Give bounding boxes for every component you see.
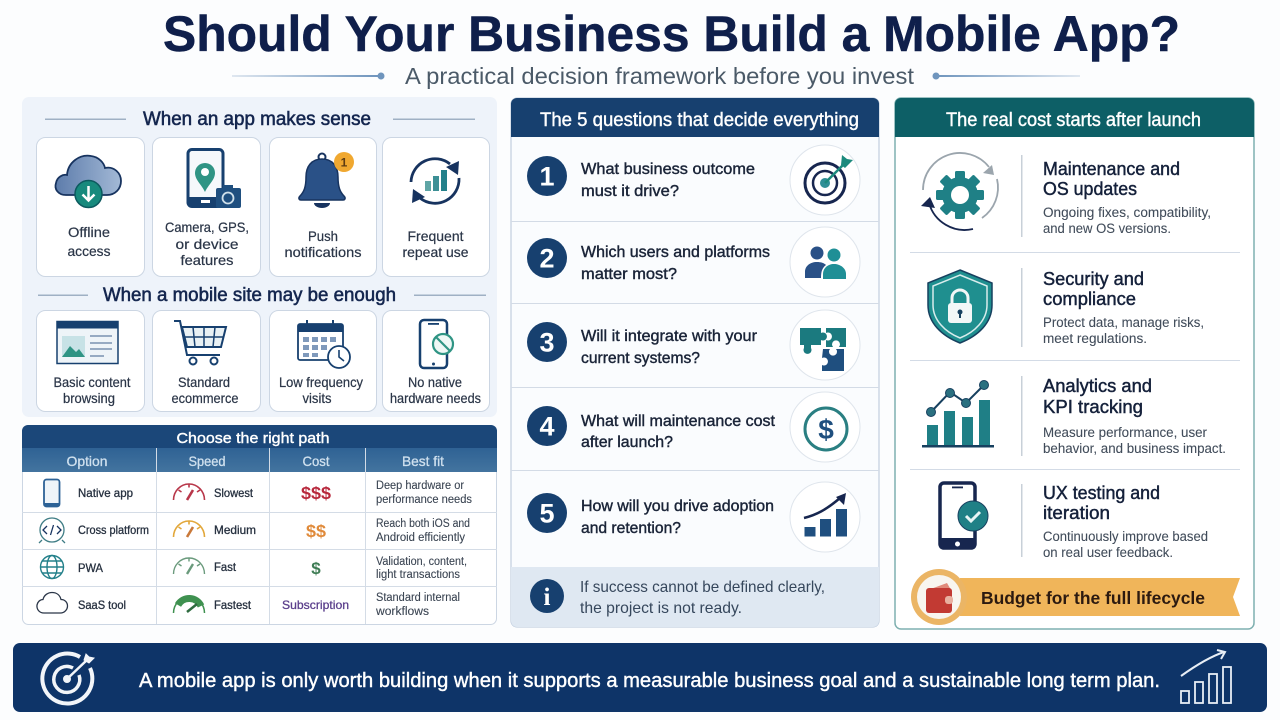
row: native app [44, 480, 472, 506]
row: cross platform: Cross platform [78, 523, 149, 537]
callout: success definition [511, 567, 879, 627]
icon: phone [44, 480, 60, 506]
icon: shield with lock [928, 270, 992, 343]
question 2: Which users and platforms [581, 244, 770, 261]
row: cross platform: Medium [214, 523, 256, 537]
icon: growth bars outline [1181, 650, 1231, 703]
icon: phone with prohibited sign [420, 320, 453, 368]
row: SaaS tool: SaaS tool [78, 598, 126, 612]
heading: when a mobile site may be enough: When a mobile site may be enough [103, 285, 396, 306]
question 4 [527, 392, 860, 462]
subtitle: A practical decision framework before you invest [405, 63, 914, 89]
item: ux testing: on real user feedback. [1043, 545, 1173, 560]
card: camera, GPS, device features: or device [176, 236, 239, 252]
banner: budget for the full lifecycle: Budget for the full lifecycle [981, 588, 1205, 608]
icon: fastest gauge [174, 597, 204, 613]
item: security: Protect data, manage risks, [1043, 315, 1204, 330]
icon: cloud outline [37, 592, 68, 613]
question 2: matter most? [581, 266, 677, 283]
item: maintenance: Maintenance and [1043, 159, 1180, 179]
row: native app: Slowest [214, 486, 254, 500]
panel: the real cost: The real cost starts after launch [946, 110, 1201, 131]
row: cross platform: Android efficiently [376, 532, 465, 544]
panel: when an app makes sense and mobile site [22, 97, 497, 417]
question 5: and retention? [581, 520, 681, 537]
question 4: What will maintenance cost [581, 413, 776, 430]
item: analytics: behavior, and business impact. [1043, 441, 1226, 456]
icon: slow gauge [174, 484, 204, 500]
item: ux testing: Continuously improve based [1043, 529, 1208, 544]
card: basic content browsing: browsing [63, 390, 115, 406]
item: analytics: KPI tracking [1043, 397, 1143, 417]
row: cross platform: Reach both iOS and [376, 518, 470, 530]
icon: phone with pin and camera [188, 150, 241, 208]
question 5: How will you drive adoption [581, 498, 774, 515]
card: low frequency visits: visits [302, 390, 332, 406]
icon: bar and line chart [922, 380, 994, 448]
row: cross platform [39, 518, 470, 544]
card: push notifications [270, 138, 376, 276]
icon: growth chart [804, 493, 847, 536]
row: PWA [40, 556, 467, 581]
card: basic content browsing: Basic content [54, 374, 131, 390]
panel: the 5 questions [511, 98, 879, 627]
row: SaaS tool: Subscription [282, 598, 349, 612]
icon: dollar circle [805, 408, 847, 450]
footer banner: A mobile app is only worth building when it supports a measurable business goal and a sustainable long term plan. [139, 670, 1160, 692]
card: no native hardware needs: No native [408, 374, 462, 390]
icon: code circle [39, 518, 65, 543]
item: maintenance: and new OS versions. [1043, 221, 1171, 236]
icon: phone with check [939, 483, 988, 549]
panel: the 5 questions: The 5 questions that decide everything [540, 110, 859, 131]
card: standard ecommerce: ecommerce [172, 390, 239, 406]
subtitle [232, 63, 1080, 89]
row: native app: performance needs [376, 494, 472, 506]
card: basic content browsing [36, 310, 144, 412]
item: security: compliance [1043, 289, 1136, 309]
card: low frequency visits: Low frequency [279, 374, 363, 390]
question 3: Will it integrate with your [581, 328, 758, 345]
card: frequent repeat use [382, 138, 490, 276]
footer banner [13, 643, 1267, 712]
card: camera, GPS, device features: Camera, GPS, [165, 219, 249, 235]
table: choose the right path: Speed [188, 453, 226, 469]
question 5: 5 [539, 498, 555, 528]
heading: when an app makes sense: When an app makes sense [143, 109, 371, 130]
item: security: meet regulations. [1043, 331, 1147, 346]
row: native app: Native app [78, 486, 133, 500]
item: maintenance [921, 153, 1211, 237]
icon: fast gauge [174, 558, 204, 574]
question 5 [527, 482, 860, 552]
row: native app: Deep hardware or [376, 480, 464, 492]
item: security: Security and [1043, 269, 1144, 289]
item: ux testing: UX testing and [1043, 483, 1160, 503]
icon: target with arrow [805, 155, 853, 203]
table: choose the right path: Choose the right path [176, 430, 330, 447]
card: camera, GPS, device features [152, 138, 260, 276]
icon: bell with badge: 1 [341, 156, 348, 170]
question 4: 4 [539, 412, 555, 442]
card: camera, GPS, device features: features [180, 252, 234, 268]
card: offline access [36, 138, 144, 276]
row: PWA: $ [311, 559, 321, 578]
icon: wallet [926, 583, 953, 613]
question 1: What business outcome [581, 161, 755, 178]
row: SaaS tool: workflows [375, 606, 429, 618]
card: low frequency visits [270, 310, 376, 412]
icon: globe [40, 556, 64, 578]
callout: success definition: the project is not ready. [580, 600, 742, 617]
icon: puzzle pieces [800, 328, 846, 371]
icon: dollar circle: $ [818, 414, 834, 445]
icon: shopping cart [174, 321, 226, 364]
question 2 [527, 227, 860, 297]
title: Should Your Business Build a Mobile App? [163, 6, 1180, 62]
icon: medium gauge [174, 521, 204, 537]
card: no native hardware needs [382, 310, 490, 412]
icon: two users [805, 246, 846, 279]
icon: repeat arrows with bars [411, 159, 459, 203]
card: offline access: Offline [68, 224, 110, 240]
question 3: 3 [539, 328, 555, 358]
card: standard ecommerce: Standard [178, 374, 230, 390]
icon: browser window [57, 322, 118, 364]
icon: gear with cycle arrows [921, 153, 998, 230]
question 1 [527, 145, 860, 215]
item: maintenance: OS updates [1043, 179, 1137, 199]
card: push notifications: Push [308, 228, 338, 244]
panel: the real cost [895, 98, 1254, 629]
row: cross platform: $$ [306, 521, 326, 541]
row: SaaS tool: Fastest [214, 598, 252, 612]
item: analytics [922, 376, 1226, 456]
card: offline access: access [68, 243, 110, 259]
table: choose the right path [22, 425, 497, 624]
card: no native hardware needs: hardware needs [390, 390, 481, 406]
icon: info: i [544, 584, 551, 611]
banner: budget for the full lifecycle [911, 569, 1240, 625]
row: PWA: Validation, content, [376, 556, 467, 568]
card: frequent repeat use: Frequent [408, 228, 464, 244]
table: choose the right path: Cost [302, 453, 330, 469]
icon: target outline [42, 654, 94, 704]
question 4: after launch? [581, 434, 673, 451]
icon: cloud download [55, 156, 121, 208]
question 1: 1 [539, 162, 555, 192]
question 2: 2 [539, 244, 555, 274]
item: maintenance: Ongoing fixes, compatibility, [1043, 205, 1211, 220]
icon: info [530, 579, 564, 613]
callout: success definition: If success cannot be defined clearly, [580, 579, 825, 596]
row: PWA: light transactions [376, 569, 460, 581]
question 1: must it drive? [581, 183, 679, 200]
row: SaaS tool [37, 592, 460, 618]
item: ux testing [939, 483, 1208, 560]
item: analytics: Analytics and [1043, 376, 1152, 396]
card: frequent repeat use: repeat use [402, 244, 469, 260]
question 3: current systems? [581, 350, 700, 367]
row: SaaS tool: Standard internal [376, 592, 460, 604]
row: PWA: PWA [78, 561, 103, 575]
icon: calendar with clock [298, 320, 350, 368]
table: choose the right path: Option [66, 453, 108, 469]
card: standard ecommerce [152, 310, 260, 412]
row: native app: $$$ [301, 483, 331, 503]
item: ux testing: iteration [1043, 503, 1110, 523]
item: security [928, 268, 1204, 347]
item: analytics: Measure performance, user [1043, 425, 1207, 440]
question 3 [527, 310, 860, 380]
card: push notifications: notifications [284, 244, 362, 260]
table: choose the right path: Best fit [402, 453, 444, 469]
row: PWA: Fast [214, 560, 237, 574]
